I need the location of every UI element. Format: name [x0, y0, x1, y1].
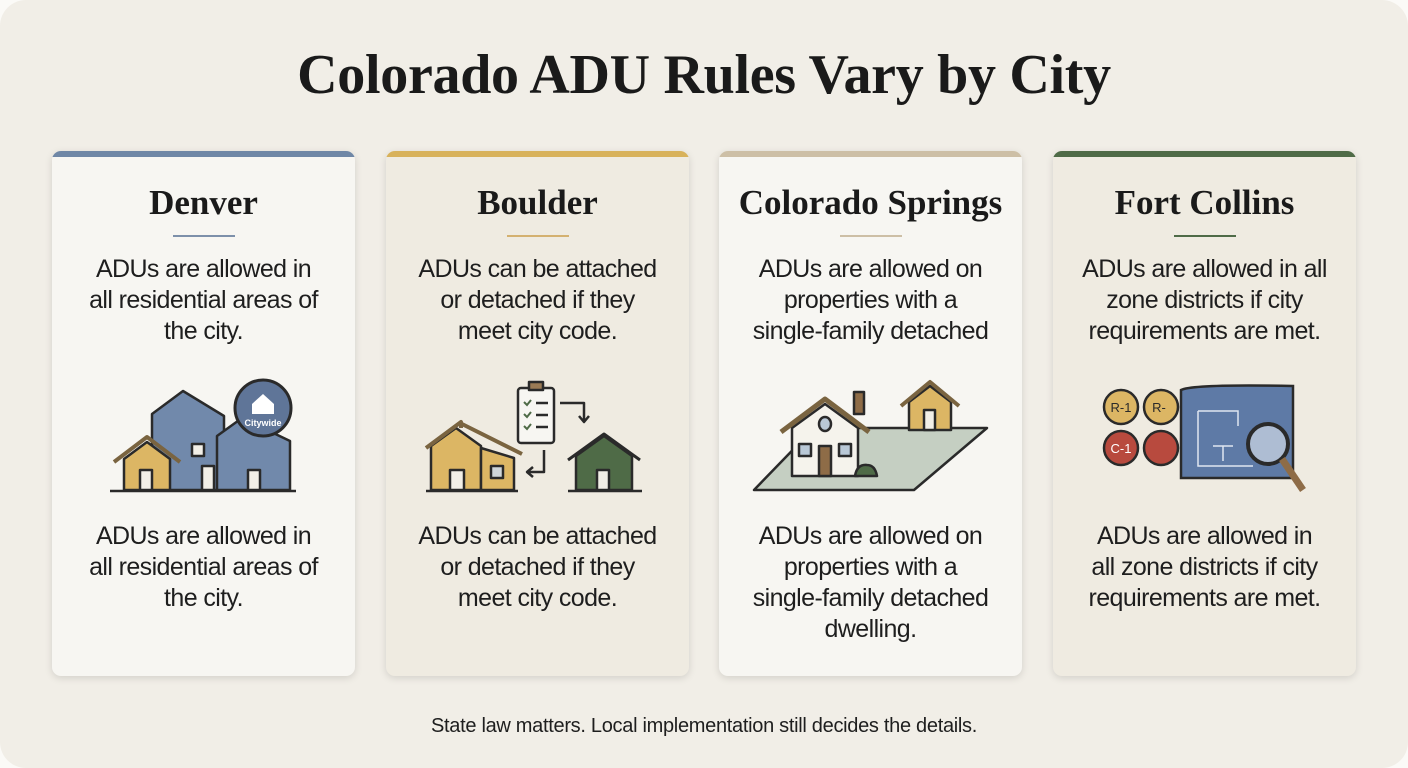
text: Colorado Springs bottom: ADUs are allowed on: [759, 522, 982, 550]
text: Fort Collins bottom: [1089, 522, 1320, 612]
footer note: State law matters. Local implementation still decides the details.: [431, 715, 977, 737]
panel: Denver: [52, 151, 355, 676]
heading: Fort Collins: Fort Collins: [1115, 183, 1294, 222]
text: Colorado Springs top: ADUs are allowed on: [759, 255, 982, 283]
text: Colorado Springs bottom: [753, 522, 988, 643]
title: Colorado ADU Rules Vary by City: [297, 44, 1111, 106]
text: Fort Collins top: zone districts if city: [1106, 286, 1303, 314]
text: Boulder top: [418, 255, 657, 345]
icon: zoning map with magnifier: C-1: [1111, 441, 1131, 456]
text: Colorado Springs top: properties with a: [784, 286, 957, 314]
text: Boulder top: meet city code.: [458, 317, 617, 345]
panel: Fort Collins: [1053, 151, 1356, 676]
icon: house on lot with ADU: [752, 380, 988, 492]
text: Boulder top: ADUs can be attached: [418, 255, 657, 283]
text: Colorado Springs bottom: dwelling.: [825, 615, 916, 643]
icon: citywide houses: Citywide: [244, 418, 282, 428]
text: Boulder bottom: meet city code.: [458, 584, 617, 612]
heading: Colorado Springs: Colorado Springs: [739, 183, 1002, 222]
panel: Colorado Springs: [719, 151, 1022, 676]
text: Denver bottom: the city.: [164, 584, 243, 612]
panel: Boulder: [386, 151, 689, 676]
text: Colorado Springs top: single-family detached: [753, 317, 988, 345]
text: Denver top: the city.: [164, 317, 243, 345]
text: Boulder bottom: [418, 522, 657, 612]
icon: attached/detached with checklist: [424, 380, 642, 492]
icon: zoning map with magnifier: [1102, 384, 1306, 492]
text: Fort Collins top: ADUs are allowed in all: [1082, 255, 1327, 283]
text: Boulder bottom: or detached if they: [440, 553, 635, 581]
text: Denver bottom: ADUs are allowed in: [96, 522, 311, 550]
text: Fort Collins bottom: requirements are met.: [1089, 584, 1320, 612]
text: Fort Collins bottom: ADUs are allowed in: [1097, 522, 1312, 550]
text: Denver bottom: [89, 522, 318, 612]
icon: zoning map with magnifier: R-: [1152, 400, 1166, 415]
text: Colorado Springs bottom: single-family detached: [753, 584, 988, 612]
text: Boulder bottom: ADUs can be attached: [418, 522, 657, 550]
heading: Denver: Denver: [149, 183, 258, 222]
text: Denver top: all residential areas of: [89, 286, 318, 314]
text: Fort Collins top: requirements are met.: [1089, 317, 1320, 345]
heading: Boulder: Boulder: [477, 183, 598, 222]
icon: zoning map with magnifier: R-1: [1111, 400, 1131, 415]
text: Denver top: [89, 255, 318, 345]
text: Fort Collins bottom: all zone districts if city: [1091, 553, 1318, 581]
text: Boulder top: or detached if they: [440, 286, 635, 314]
text: Denver top: ADUs are allowed in: [96, 255, 311, 283]
text: Denver bottom: all residential areas of: [89, 553, 318, 581]
icon: citywide houses: [110, 378, 296, 492]
text: Colorado Springs bottom: properties with a: [784, 553, 957, 581]
text: Colorado Springs top: [753, 255, 988, 345]
text: Fort Collins top: [1082, 255, 1327, 345]
